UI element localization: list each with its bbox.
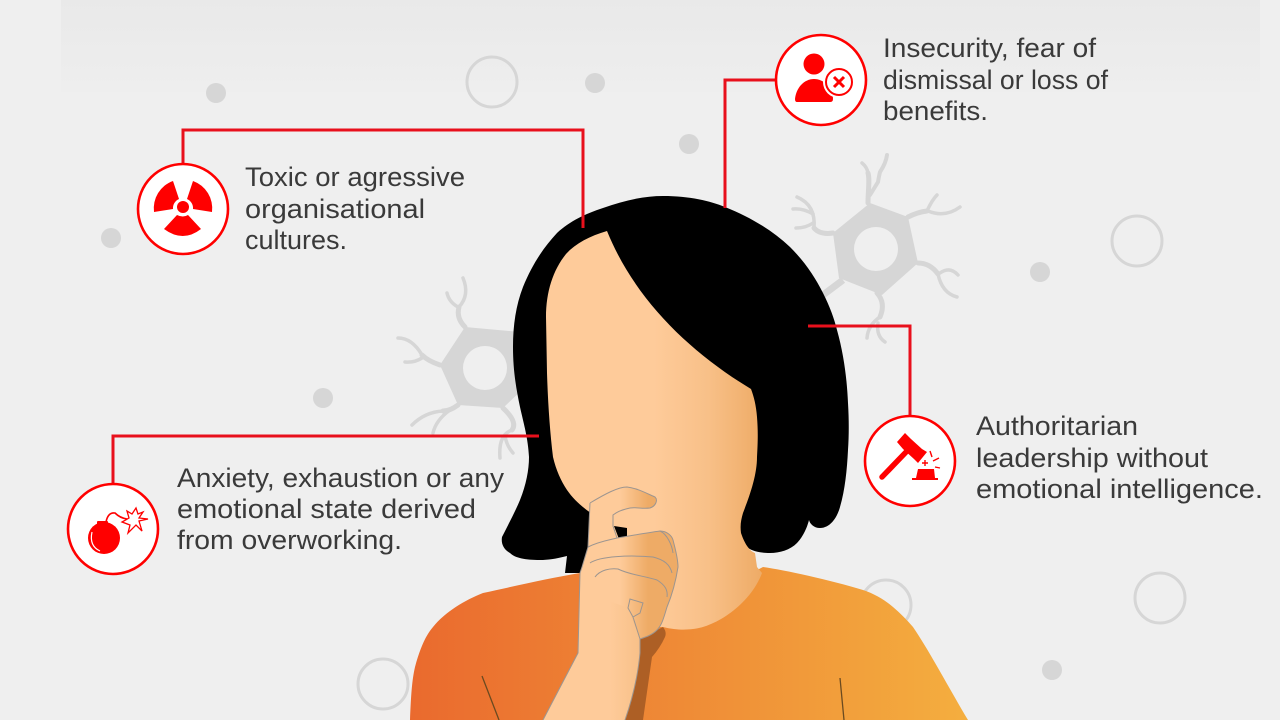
hand	[543, 487, 678, 720]
text: insecurity: dismissal or loss of	[883, 65, 1108, 95]
top band	[61, 0, 1260, 92]
callout line: anxiety	[113, 436, 539, 486]
shirt	[410, 567, 968, 720]
text: anxiety: from overworking.	[177, 525, 402, 555]
text: toxic cultures: organisational	[245, 194, 425, 224]
text: leadership	[976, 411, 1263, 504]
text: anxiety: Anxiety, exhaustion or any	[177, 463, 505, 493]
shirt creases	[482, 676, 844, 720]
hair	[502, 196, 849, 573]
text: leadership: Authoritarian	[976, 411, 1138, 441]
text: leadership: emotional intelligence.	[976, 474, 1263, 504]
background dots and rings	[101, 57, 1185, 709]
text: insecurity	[883, 33, 1108, 126]
callout line: insecurity	[725, 80, 778, 208]
arm shadow	[625, 627, 666, 720]
neuron right	[793, 155, 960, 342]
text: insecurity: benefits.	[883, 96, 988, 126]
face and neck	[546, 231, 762, 630]
icon: radiation	[138, 164, 228, 254]
text: anxiety	[177, 463, 505, 555]
callout line: toxic cultures	[183, 130, 583, 228]
text: toxic cultures: Toxic or agressive	[245, 162, 465, 192]
text: leadership: leadership without	[976, 443, 1209, 473]
callout line: leadership	[808, 326, 910, 417]
hair fleck behind fingers	[614, 526, 627, 539]
text: anxiety: emotional state derived	[177, 494, 476, 524]
person	[410, 196, 968, 720]
icon: person with cross	[776, 35, 866, 125]
icon: gavel	[865, 416, 955, 506]
text: toxic cultures: cultures.	[245, 225, 347, 255]
text: toxic cultures	[245, 162, 465, 255]
text: insecurity: Insecurity, fear of	[883, 33, 1097, 63]
icon: bomb	[68, 484, 158, 574]
neuron left	[398, 278, 525, 458]
